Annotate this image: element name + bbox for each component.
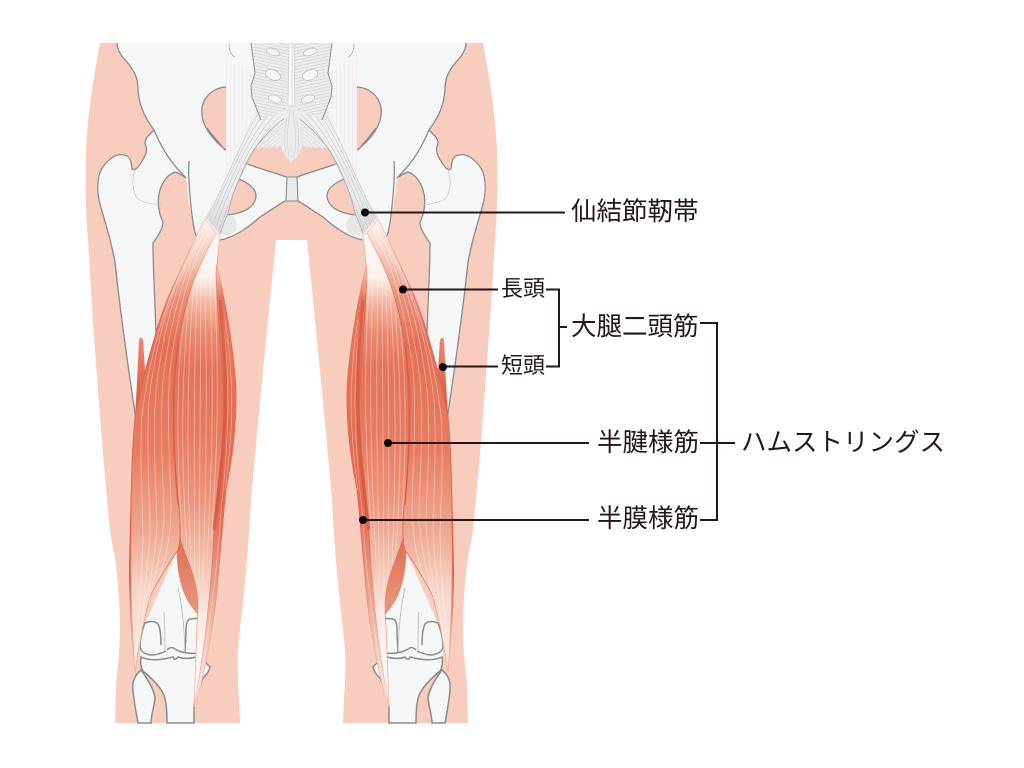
sacrospinous fan xyxy=(295,108,332,148)
sacral foramina xyxy=(302,47,318,57)
sciatic notch xyxy=(291,87,381,178)
bracket: hamstrings xyxy=(700,323,735,520)
leader: semimembranosus xyxy=(363,519,589,521)
label: short head: 短頭 xyxy=(501,353,545,378)
pubic symphysis xyxy=(286,177,298,201)
biceps fibres xyxy=(374,232,447,660)
label: semimembranosus: 半膜様筋 xyxy=(597,505,699,533)
leader: short head xyxy=(443,366,498,368)
ligament fibres xyxy=(300,110,376,232)
biceps short head xyxy=(436,338,454,675)
label: hamstrings: ハムストリングス xyxy=(741,429,945,457)
fibula xyxy=(428,670,450,723)
bones: left side xyxy=(98,43,292,723)
label: sacrotuberous ligament: 仙結節靭帯 xyxy=(571,198,699,226)
acetabular shading xyxy=(346,215,366,235)
hamstring muscles: right leg xyxy=(347,219,454,707)
ligament sheet xyxy=(320,60,357,178)
ligament band xyxy=(297,108,378,234)
leader dots xyxy=(359,208,447,524)
sacrum half xyxy=(291,43,332,120)
leader: semitendinosus xyxy=(388,442,589,444)
knee joint line xyxy=(384,648,416,653)
pelvis outline xyxy=(298,43,466,240)
bracket: biceps femoris xyxy=(546,290,567,366)
label: long head: 長頭 xyxy=(501,276,545,301)
hamstring muscles: left leg xyxy=(129,219,236,707)
semimembranosus lower belly xyxy=(382,533,406,618)
biceps long head xyxy=(367,219,452,673)
sacrotuberous ligament: right xyxy=(291,43,378,234)
semitendinosus fibres xyxy=(366,280,405,590)
label: biceps femoris: 大腿二頭筋 xyxy=(571,313,699,341)
leaders and labels xyxy=(363,212,735,520)
lateral condyle xyxy=(417,622,443,655)
semimembranosus fibres xyxy=(351,320,383,680)
distal femur shaft xyxy=(382,548,443,660)
semitendinosus xyxy=(359,233,410,707)
sacrum outline xyxy=(322,43,332,120)
ilium inner curve xyxy=(348,44,354,57)
skin: right thigh and hip xyxy=(290,43,497,723)
femoral neck line xyxy=(421,170,450,205)
femur upper xyxy=(397,130,485,420)
coccyx half xyxy=(291,100,303,163)
coccyx fibres xyxy=(293,110,299,157)
leader: long head xyxy=(403,288,498,290)
leader: sacrotuberous ligament xyxy=(365,212,565,214)
semimembranosus xyxy=(347,262,388,705)
band edge xyxy=(297,117,363,234)
tibia xyxy=(373,656,442,723)
obturator foramen xyxy=(327,170,362,216)
biceps inner seam xyxy=(405,345,409,505)
label: semitendinosus: 半腱様筋 xyxy=(597,429,699,457)
femur shaft lines xyxy=(398,588,419,652)
sacral median ridge xyxy=(291,43,295,106)
sacrotuberous ligament: left xyxy=(205,43,292,234)
muscle dark seam xyxy=(358,300,369,530)
sciatic notch outline xyxy=(297,87,381,177)
skin: left thigh and hip xyxy=(86,43,293,723)
pelvis body xyxy=(291,43,466,240)
bones: right pelvis, femur, knee, tibia and fibula xyxy=(291,43,485,723)
medial condyle xyxy=(382,618,398,652)
